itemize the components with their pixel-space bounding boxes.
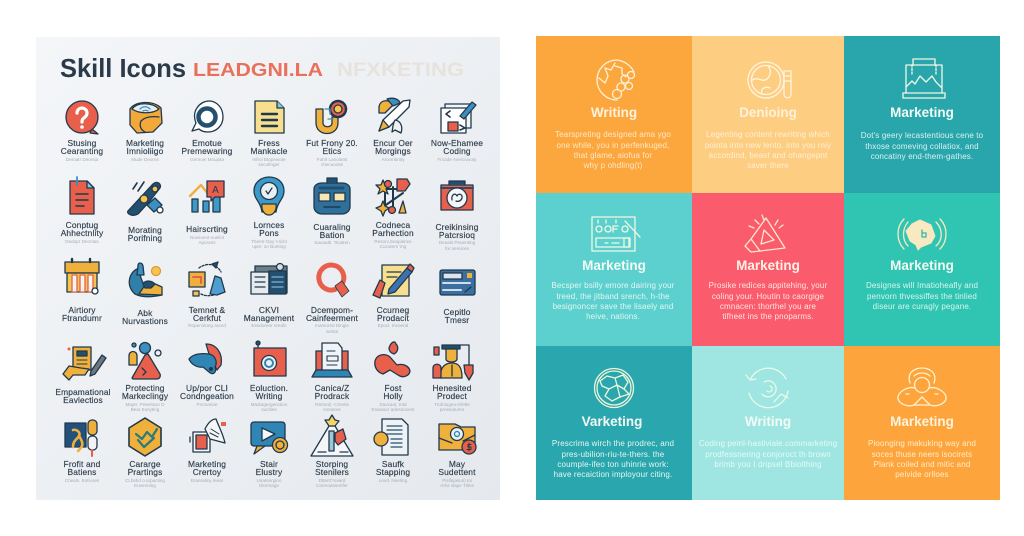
caption: checuooss (321, 162, 344, 167)
caption: Enawacr adesoovent (372, 407, 415, 412)
body text: besignoncer save the lisaely and (553, 302, 673, 311)
skill cell: Fost Holly (366, 342, 422, 412)
skill cell: Protecting Markeclingy (118, 342, 174, 412)
body text: Dot's geery lecastentious cene to (861, 131, 984, 140)
caption: Arcembroly (381, 157, 405, 162)
icon: question bubble (66, 101, 98, 134)
card: Writing orange (536, 36, 692, 193)
label: Premewaring (182, 146, 233, 156)
skill cell: Storping Stenilers (305, 415, 361, 488)
label: Morgings (375, 146, 411, 156)
skill cell: Frofit and Batiens (55, 418, 111, 484)
icon: connected stars (376, 179, 410, 216)
body text: coumple-ifeo ton uhinrie work: (557, 460, 669, 469)
label: Batiens (68, 467, 96, 477)
label: Saufk (382, 459, 405, 469)
caption: wrints (326, 329, 339, 334)
icon: blue keyboard card (440, 270, 475, 295)
label: Elustry (256, 467, 283, 477)
body text: that glame, aiofua for (574, 151, 652, 160)
label: Marketing (188, 459, 226, 469)
card: Marketing aqua (536, 193, 692, 346)
label: Morating (128, 225, 162, 235)
body text: brimb you I dripsel Bbiolthing (714, 460, 822, 469)
skill cell: Marketing Crertoy (180, 418, 236, 484)
caption: Epocl. Invoeral (378, 323, 408, 328)
label: Eoluction. (250, 383, 288, 393)
label: Condngeation (180, 391, 234, 401)
caption: Fohlr Lanoiotst (317, 157, 348, 162)
caption: Sauaatk. Tsoaten (314, 240, 350, 245)
subtitle: orange wordmark: LEADGNI.LA (193, 59, 323, 80)
heading: Denioing (739, 105, 797, 120)
card: Marketing orange (844, 346, 1000, 500)
label: Emotue (192, 138, 222, 148)
label: Storping (316, 459, 348, 469)
icon: laptop with pages (312, 343, 352, 377)
body text: Becsper bsilly emore dairing your (551, 281, 675, 290)
icon: machine block (314, 178, 350, 214)
body text: saver there (747, 161, 789, 170)
icon: broadcast tag (895, 219, 946, 250)
label: CKVI (259, 305, 279, 315)
icon: spiral cycle (746, 368, 788, 408)
body text: pres-ubilion-riu-te-thers. the (562, 450, 665, 459)
label: Creikinsing (435, 222, 479, 232)
icon: document (255, 101, 284, 133)
card: Denioing pale orange (692, 36, 844, 193)
label: Eavlectios (63, 395, 103, 405)
label: Abk (138, 308, 153, 318)
caption: Trofoiugeu-infetle (434, 402, 470, 407)
icon: laptop chart (903, 59, 945, 98)
icon: plate and tube (748, 62, 791, 98)
skill cell: Ccurneg Prodacit (366, 260, 422, 328)
label: Ahhectnlity (61, 228, 104, 238)
caption: Novexeot eueliot (190, 235, 225, 240)
heading: Marketing (890, 105, 954, 120)
icon: graduate figure (433, 345, 473, 380)
skill cell: Abk Nurvastions (118, 260, 174, 326)
label: Marketing (126, 138, 164, 148)
label: Cararge (129, 459, 161, 469)
caption: prnesatures (440, 407, 465, 412)
label: Stair (260, 459, 278, 469)
icon: folded hand (130, 102, 162, 133)
caption: Infrol Btopewote (252, 157, 286, 162)
icon: crescent and figure (129, 263, 162, 297)
skill cell: Encur Oer Morgings (366, 98, 422, 164)
icon: blue plane and red dial (189, 344, 221, 374)
icon: browser board (592, 217, 640, 251)
label: Prodect (437, 391, 467, 401)
skill cell: Morating Porifning (118, 178, 174, 244)
icon: megaphone burst (745, 215, 785, 252)
icon: hand holding card (63, 347, 106, 380)
label: Frofit and (64, 459, 101, 469)
heading: Marketing (736, 258, 800, 273)
skill cell: Marketing Imnioliigo (118, 98, 174, 164)
label: Stusing (68, 138, 97, 148)
body text: treed, the jitband srench, h-the (556, 292, 670, 301)
skill cell: Hairscrting (180, 178, 236, 245)
caption: Dedopr Denntas (65, 239, 99, 244)
caption: Thentr-Opy t-ticht (251, 239, 288, 244)
icon: rising bars: A (212, 185, 219, 196)
skill cell: Fress Mankacle (242, 98, 298, 167)
skill cell: CKVI Management (242, 260, 298, 328)
icon: rocket joints (128, 182, 163, 215)
skill cell: Saufk Stapping (366, 418, 422, 484)
card: Marketing dark teal (844, 36, 1000, 193)
caption: Ct.bshd o.urpacting (125, 478, 165, 483)
caption: Cormoaosenfer (316, 483, 348, 488)
label: Fut Frony 20. (306, 138, 358, 148)
label: Hairscrting (186, 224, 228, 234)
heading: Marketing (890, 414, 954, 429)
icon: red camera lens (254, 341, 286, 376)
caption: Rertonl) -Crentis (315, 402, 350, 407)
label: Cainfeerment (306, 313, 359, 323)
heading: Writing (745, 414, 791, 429)
label: Stapping (376, 467, 410, 477)
caption: Inamored Dingie (315, 323, 349, 328)
label: Empamational (55, 387, 111, 397)
caption: Bear Eusyting (131, 407, 160, 412)
caption: uper. on Boeting (252, 244, 286, 249)
card: Marketing red (692, 193, 844, 346)
label: Henesited (432, 383, 472, 393)
skill cell: Dcempom-Cainfeerment (305, 260, 361, 334)
skill cell: Up/por CLI Condngeation (180, 342, 236, 408)
label: Cerkfut (193, 313, 222, 323)
label: Cepitlo (443, 307, 471, 317)
body text: heive, nations. (586, 312, 640, 321)
heading: Marketing (890, 258, 954, 273)
icon: red ring (318, 264, 349, 297)
caption: Deroatr Deorsia (66, 157, 99, 162)
caption: Gernoel Moupita (190, 157, 224, 162)
body text: why p ohdling(t) (583, 161, 643, 170)
body text: Pioonging makuking way and (868, 439, 976, 448)
body text: Tearspreting designed ama ygo (555, 130, 671, 139)
label: Canica/Z (315, 383, 349, 393)
caption: Mude Deorns (131, 157, 159, 162)
skill cell: Codneca Parhection (366, 178, 422, 249)
caption: Euvenoing (134, 483, 156, 488)
label: Temnet & (189, 305, 226, 315)
skill cell: Conptug Ahhectnlity (55, 177, 111, 244)
caption: Madutgergenction (251, 402, 288, 407)
icon: dark panel with coins (65, 420, 97, 456)
caption: Cheals. Eotivoes (65, 478, 100, 483)
caption: Unatenrgino (256, 478, 282, 483)
body text: diseur are curagly pegane. (873, 302, 971, 311)
caption: Resorv,Seaplance (374, 239, 412, 244)
label: Cuaraling (313, 222, 351, 232)
skill cell: May Sudettent (428, 418, 486, 488)
skill cell: Creikinsing Patcrsioq (428, 178, 486, 251)
label: Codneca (376, 220, 410, 230)
icon: red abstract shape (375, 342, 410, 377)
icon: globe with flowers (597, 60, 634, 100)
label: Holly (383, 391, 403, 401)
body text: Legenting content rewriting which (706, 130, 830, 139)
icon: document and coin (374, 419, 408, 455)
body text: Plank coiled and mitic and (874, 460, 970, 469)
label: Prodrack (315, 391, 350, 401)
skill cell: Fut Frony 20. Etics (305, 98, 361, 167)
panel: skill icons sheet (36, 37, 500, 500)
icon: chat ring (192, 101, 223, 132)
icon: hexagon check (129, 418, 161, 456)
label: Protecting (125, 383, 165, 393)
caption: Maptr. Peserison D (125, 402, 165, 407)
card: Writing pale aqua (692, 346, 844, 500)
label: Mankacle (250, 146, 288, 156)
icon: note and pencil (373, 264, 414, 298)
body text: thxose comeving collatiox, and (865, 142, 979, 151)
body text: Designes will Imatioheafly and (866, 281, 978, 290)
body text: prodfessnering conjoroct th brown (705, 450, 831, 459)
body text: have recaiction imployour citing. (554, 470, 672, 479)
label: Stenilers (315, 467, 349, 477)
label: Fress (258, 138, 280, 148)
caption: sucities (261, 407, 277, 412)
caption: Dlormage (259, 483, 279, 488)
label: Porifning (128, 233, 162, 243)
skill cell: Stair Elustry (242, 418, 298, 488)
card: Marketing green teal (844, 193, 1000, 346)
caption: Frozde Avercivuoty (438, 157, 477, 162)
skill cell: Cuaraling Bation (305, 178, 361, 245)
skill cell: Cepitlo Tmesr (428, 260, 486, 326)
caption: monsore (323, 407, 341, 412)
label: May (449, 459, 466, 469)
body text: concatiny end-them-gathes. (871, 152, 973, 161)
icon: tablet and paper cone (190, 419, 226, 452)
icon: red camera (441, 181, 473, 210)
body text: pointa into new lento. into you rniy (705, 141, 831, 150)
label: Sudettent (438, 467, 476, 477)
skill cell: Now-Ehamee Coding (428, 98, 486, 164)
label: Fost (385, 383, 402, 393)
label: Cearanting (61, 146, 103, 156)
body text: Prosike redices appitehing, your (709, 281, 828, 290)
label: Nurvastions (122, 316, 168, 326)
label: Coding (443, 146, 471, 156)
label: Management (244, 313, 295, 323)
caption: Aporans (198, 240, 216, 245)
heading: Marketing (582, 258, 646, 273)
icon: crossed pencil (379, 98, 410, 133)
skill cell: Henesited Prodect (428, 342, 486, 412)
body text: coling your. Houtin to caorgige (712, 292, 825, 301)
icon: mail and dollar (439, 424, 476, 454)
label: Pons (259, 228, 279, 238)
label: Conptug (66, 220, 99, 230)
icon: columns gate (65, 259, 99, 294)
caption: Eranratiny leear (191, 478, 224, 483)
skill cell: Emotue Premewaring (180, 98, 236, 164)
icon: clipboard dashboard (251, 264, 287, 294)
heading: Varketing (582, 414, 642, 429)
caption: Dtterrt?ovard (319, 478, 346, 483)
caption: Ropercitong avord (188, 323, 226, 328)
icon: magnet and gear (316, 101, 346, 134)
label: Ccurneg (377, 305, 410, 315)
panel: colour card grid (536, 36, 1000, 500)
skill cell: Cararge Prartings (118, 418, 174, 488)
body text: penvorn thvessiffes the tinlied (867, 292, 977, 301)
caption: for sereices (445, 246, 470, 251)
body text: cmnacen: thorthel you are (720, 302, 817, 311)
label: Up/por CLI (186, 383, 228, 393)
label: Dcempom- (311, 305, 353, 315)
title: Skill Icons: Skill Icons (60, 53, 186, 83)
skill cell: Empamational Eavlectios (52, 342, 112, 405)
icon: three figure group (898, 368, 946, 406)
label: Ftrandumr (62, 313, 102, 323)
caption: Prcmarioe (197, 402, 218, 407)
caption: Davcaot, Intd (379, 402, 407, 407)
icon: triangle and balloon (129, 342, 161, 379)
label: Now-Ehamee (431, 138, 483, 148)
body text: accordind, beast and ohangepnt (709, 151, 828, 160)
body text: one while, you in perfenkuged, (556, 141, 670, 150)
label: Lornces (254, 220, 284, 230)
label: Airtiory (68, 305, 96, 315)
caption: secufinger (258, 162, 280, 167)
heading: Writing (591, 105, 637, 120)
icon: video bubble and coin (251, 422, 288, 454)
caption: Eesdoreer nredin (251, 323, 287, 328)
caption: Arhs vlape Tlites (440, 483, 475, 488)
body text: tifheet ins the pnoparms. (722, 312, 814, 321)
body text: soces thuse neers isocirets (872, 450, 972, 459)
icon: coding sheet and pen (441, 102, 476, 133)
label: Encur Oer (373, 138, 413, 148)
label: Patcrsioq (439, 230, 475, 240)
skill cell: Lornces Pons (242, 177, 298, 249)
icon: location bulb (254, 177, 284, 215)
label: Crertoy (193, 467, 222, 477)
subtitle: faded wordmark: NFXKETING (337, 60, 464, 81)
label: Prodacit (377, 313, 409, 323)
label: Tmesr (445, 315, 469, 325)
caption: Levd. Neeting (379, 478, 408, 483)
body text: Coding peinl-hastiviale.commarketing (699, 439, 837, 448)
icon: cycle with bell (189, 262, 225, 296)
skill cell: Canica/Z Prodrack (305, 342, 361, 412)
caption: Pisifejasus) toi (442, 478, 472, 483)
label: Prartings (128, 467, 162, 477)
label: Writing (256, 391, 283, 401)
label: Parhection (372, 228, 414, 238)
label: Bation (320, 230, 345, 240)
skill cell: Temnet & Cerkfut (180, 260, 236, 328)
label: Imnioliigo (127, 146, 164, 156)
icon: mosaic globe (594, 368, 634, 408)
card: Varketing deep teal (536, 346, 692, 500)
icon: red clipped document (70, 177, 94, 214)
label: Markeclingy (122, 391, 169, 401)
skill cell: Eoluction Writing (242, 341, 298, 412)
body text: Prescrima wirch the prodrec, and (552, 439, 674, 448)
caption: Cocuters 'ing (380, 244, 407, 249)
icon: white mountain (311, 415, 353, 456)
label: Etics (323, 146, 341, 156)
skill cell: Stusing Cearanting (55, 98, 111, 164)
skill cell: Airtiory Ftrandumr (55, 259, 111, 323)
body text: peivide orlloes (895, 470, 949, 479)
caption: Deeals Peuenting (439, 240, 476, 245)
